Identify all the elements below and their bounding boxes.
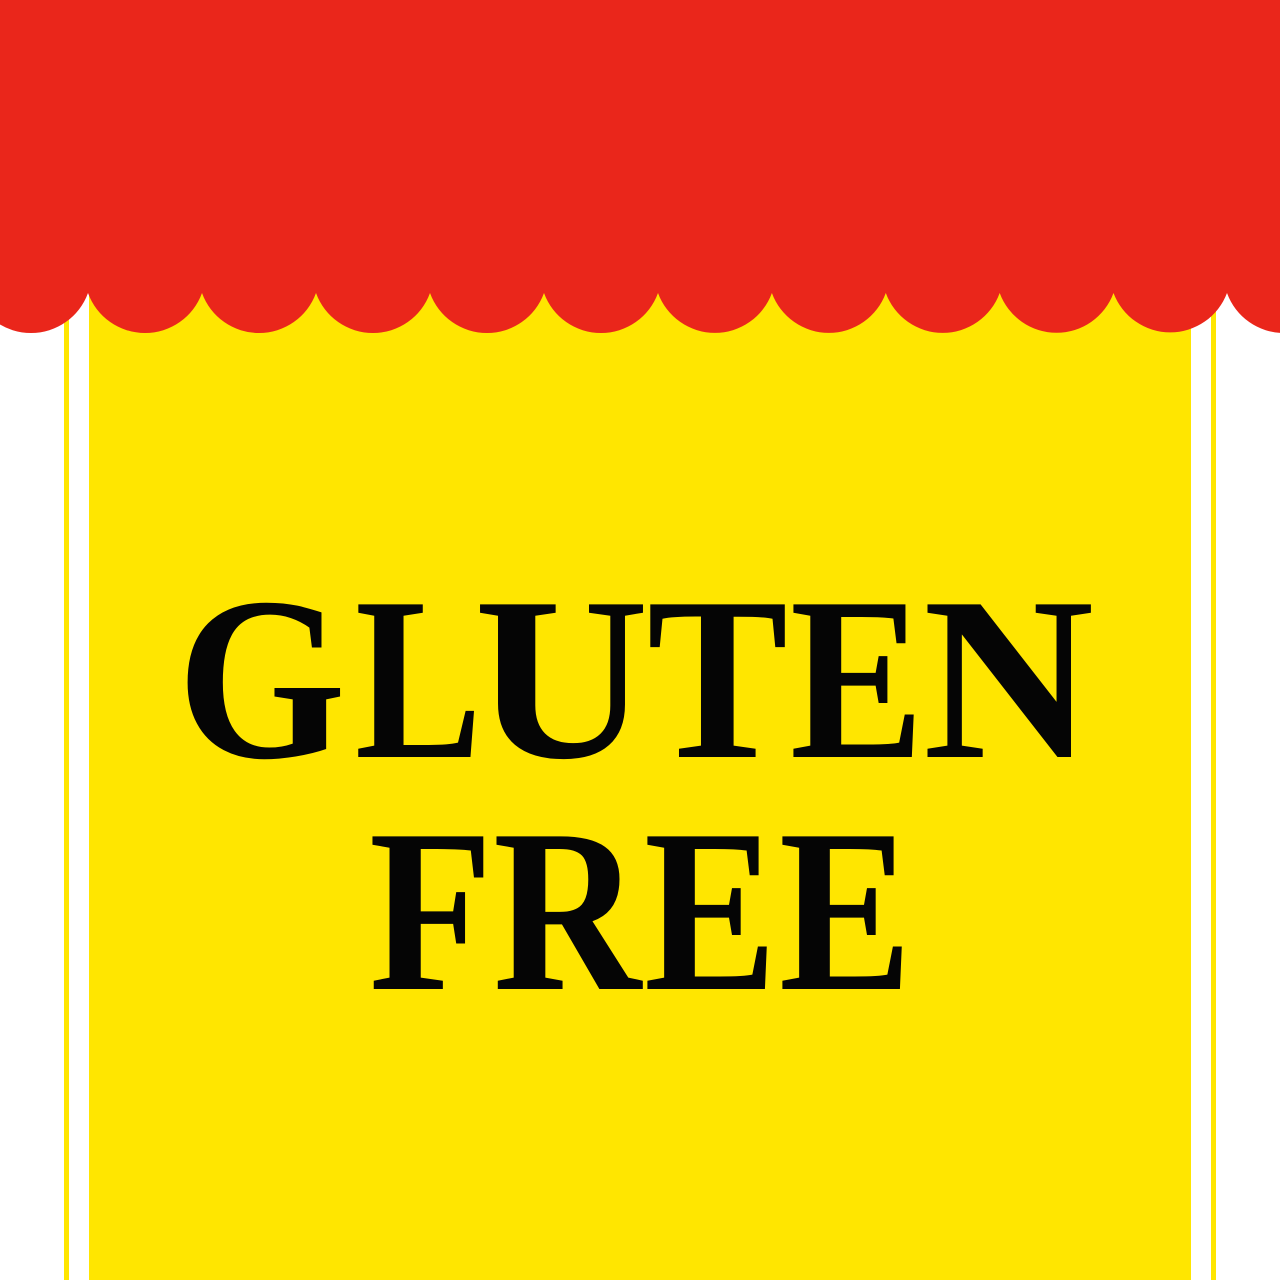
- title line 2: R: [493, 782, 643, 1040]
- red awning with scalloped edge: [0, 0, 1280, 333]
- title line 2: F: [369, 782, 493, 1040]
- title line 1: N: [923, 550, 1094, 808]
- right thin yellow stripe: [1211, 300, 1216, 1280]
- left thin yellow stripe: [64, 300, 69, 1280]
- title line 2: E: [779, 782, 912, 1040]
- yellow panel: [89, 290, 1191, 1280]
- title line 2: E: [644, 782, 777, 1040]
- title line 1: T: [647, 550, 788, 808]
- title line 1: U: [474, 550, 649, 808]
- title line 1: E: [790, 550, 924, 808]
- title line 1: G: [177, 550, 346, 808]
- title line 1: L: [355, 550, 482, 808]
